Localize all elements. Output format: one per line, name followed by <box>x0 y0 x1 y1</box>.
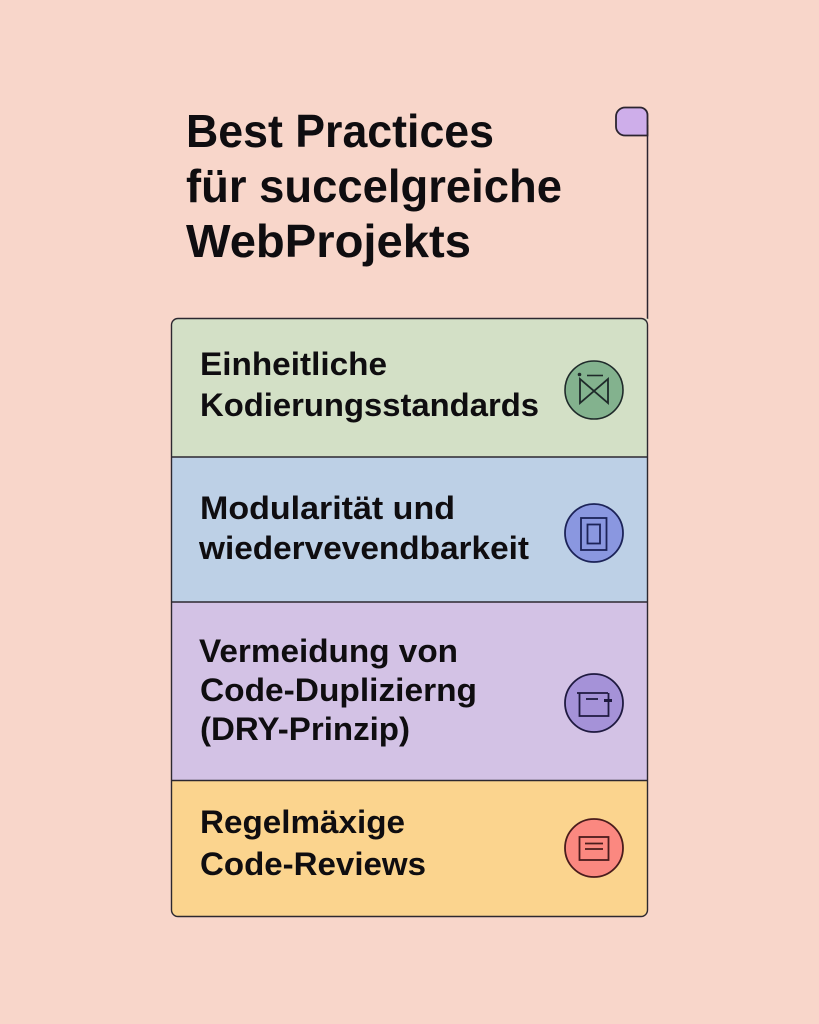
text: coding standards <box>200 346 539 423</box>
text: coding standards: Einheitliche <box>200 346 387 382</box>
icon: document card <box>565 819 623 877</box>
text: code reviews: Code-Reviews <box>200 846 426 882</box>
text: modularity: Modularität und <box>200 490 455 526</box>
text: avoiding duplication <box>199 633 477 747</box>
icon: nested rectangles <box>565 504 623 562</box>
title: Best Practices <box>186 105 494 157</box>
title <box>186 105 562 267</box>
panel: code reviews <box>172 780 648 916</box>
purple tab <box>616 108 648 136</box>
text: code reviews: Regelmäxige <box>200 804 405 840</box>
panel: best practices stack <box>172 318 648 916</box>
icon: window box <box>565 674 623 732</box>
text: coding standards: Kodierungsstandards <box>200 387 539 423</box>
text: avoiding duplication: Code-Duplizierng <box>200 672 477 708</box>
title: für succelgreiche <box>186 160 562 212</box>
panel: coding standards <box>172 318 648 457</box>
panel outline and dividers <box>172 318 648 916</box>
text: avoiding duplication: (DRY-Prinzip) <box>200 711 410 747</box>
text: modularity: wiedervevendbarkeit <box>198 530 529 566</box>
panel: modularity <box>172 457 648 602</box>
panel: avoiding duplication <box>172 602 648 780</box>
icon: bowtie <box>565 361 623 419</box>
text: code reviews <box>200 804 426 882</box>
text: avoiding duplication: Vermeidung von <box>199 633 458 669</box>
connector line from tab to panel <box>646 125 648 319</box>
text: modularity <box>198 490 529 566</box>
title: WebProjekts <box>186 215 471 267</box>
